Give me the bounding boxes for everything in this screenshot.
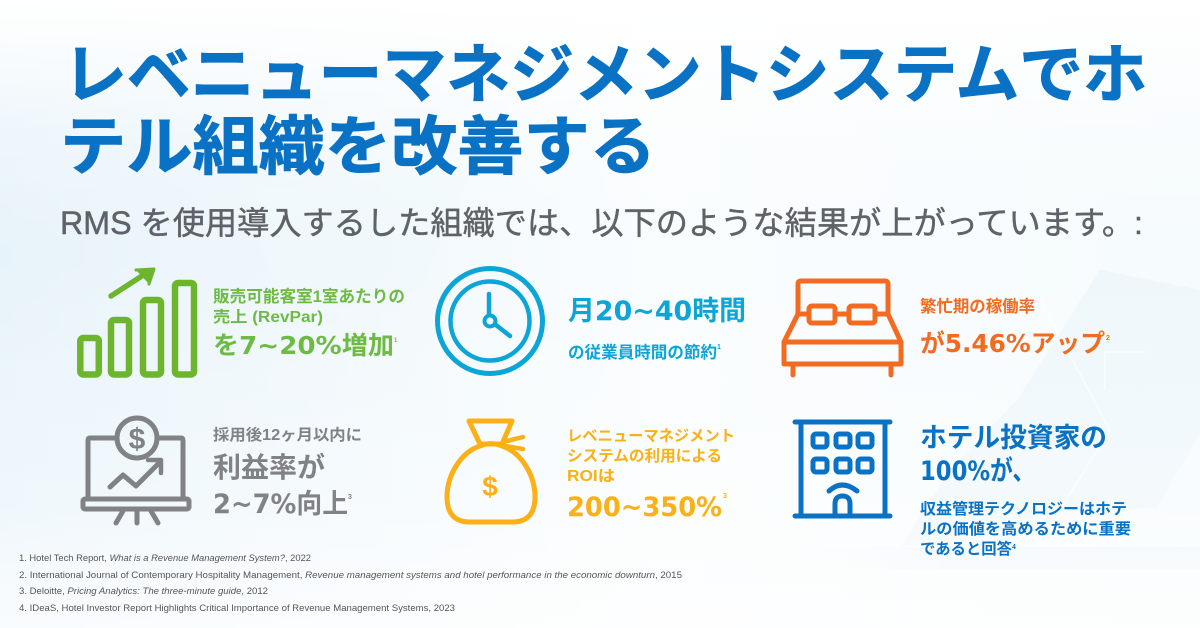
panel: profit margin [83,418,362,523]
text: investors: であると回答 [920,539,1012,558]
text: investors: 100%が、 [920,455,1035,487]
icon: clock [438,268,542,374]
icon: presentation board with dollar: $ [129,423,146,456]
footnotes: 1. Hotel Tech Report, What is a Revenue Management System?, 2022 [19,553,311,564]
panel: hotel investors [795,422,1131,558]
icon: presentation board with dollar [83,418,189,523]
icon: money bag: $ [482,471,498,502]
footnotes [19,553,682,614]
text: hours saved [568,296,746,362]
text: hours saved: の従業員時間の節約 [568,342,717,362]
text: ROI: レベニューマネジメント [567,428,735,445]
text: profit margin: 採用後12ヶ月以内に [213,425,362,444]
text: RevPAR label: を7~20%増加 [213,331,394,360]
text: occupancy: 2 [1106,335,1110,342]
text: RevPAR label: 売上 (RevPar) [213,308,323,326]
text: RevPAR label: 販売可能客室1室あたりの [213,286,405,306]
subtitle: RMS を使用導入するした組織では、以下のような結果が上がっています。: [60,205,1143,241]
text: occupancy: が5.46%アップ [920,329,1105,358]
text: investors: 収益管理テクノロジーはホテ [920,499,1127,518]
panel: RevPAR increase [80,269,405,374]
footnotes: 2. International Journal of Contemporary Hospitality Management, Revenue management systems and hotel performance in the economic downturn , 2015 [19,570,682,581]
text: investors: ホテル投資家の [920,423,1107,453]
title: テル組織を改善する [60,111,656,183]
icon: rising bar chart [80,269,194,374]
text: RevPAR label: 1 [394,338,398,344]
text: ROI: 3 [723,493,727,500]
icon: bed [784,281,901,375]
text: investors: 4 [1012,544,1016,551]
title [60,39,1147,183]
text: RevPAR label [213,286,405,360]
text: occupancy: 繁忙期の稼働率 [920,296,1035,316]
text: hours saved: 1 [717,344,721,351]
icon: hotel building [795,422,890,516]
text: investors [920,423,1131,558]
panel: employee hours saved [438,268,746,374]
footnotes: 4. IDeaS, Hotel Investor Report Highlights Critical Importance of Revenue Management Systems, 2023 [19,603,455,614]
text: occupancy [920,296,1110,358]
text: ROI: ROIは [567,468,615,485]
text: profit margin: 利益率が [213,451,325,483]
text: ROI [567,428,735,523]
text: profit margin: 2~7%向上 [213,489,348,520]
text: investors: ルの価値を高めるために重要 [920,520,1131,538]
text: hours saved: 月20~40時間 [568,296,746,327]
footnotes: 3. Deloitte, Pricing Analytics: The three-minute guide, 2012 [19,586,268,597]
panel: peak occupancy [784,281,1110,375]
text: ROI: 200~350% [567,492,722,523]
text: profit margin: 3 [348,494,352,501]
panel: ROI [447,421,735,523]
title: レベニューマネジメントシステムでホ [63,39,1147,111]
icon: money bag [447,421,535,522]
text: ROI: システムの利用による [567,448,722,465]
text: profit margin [213,425,362,520]
